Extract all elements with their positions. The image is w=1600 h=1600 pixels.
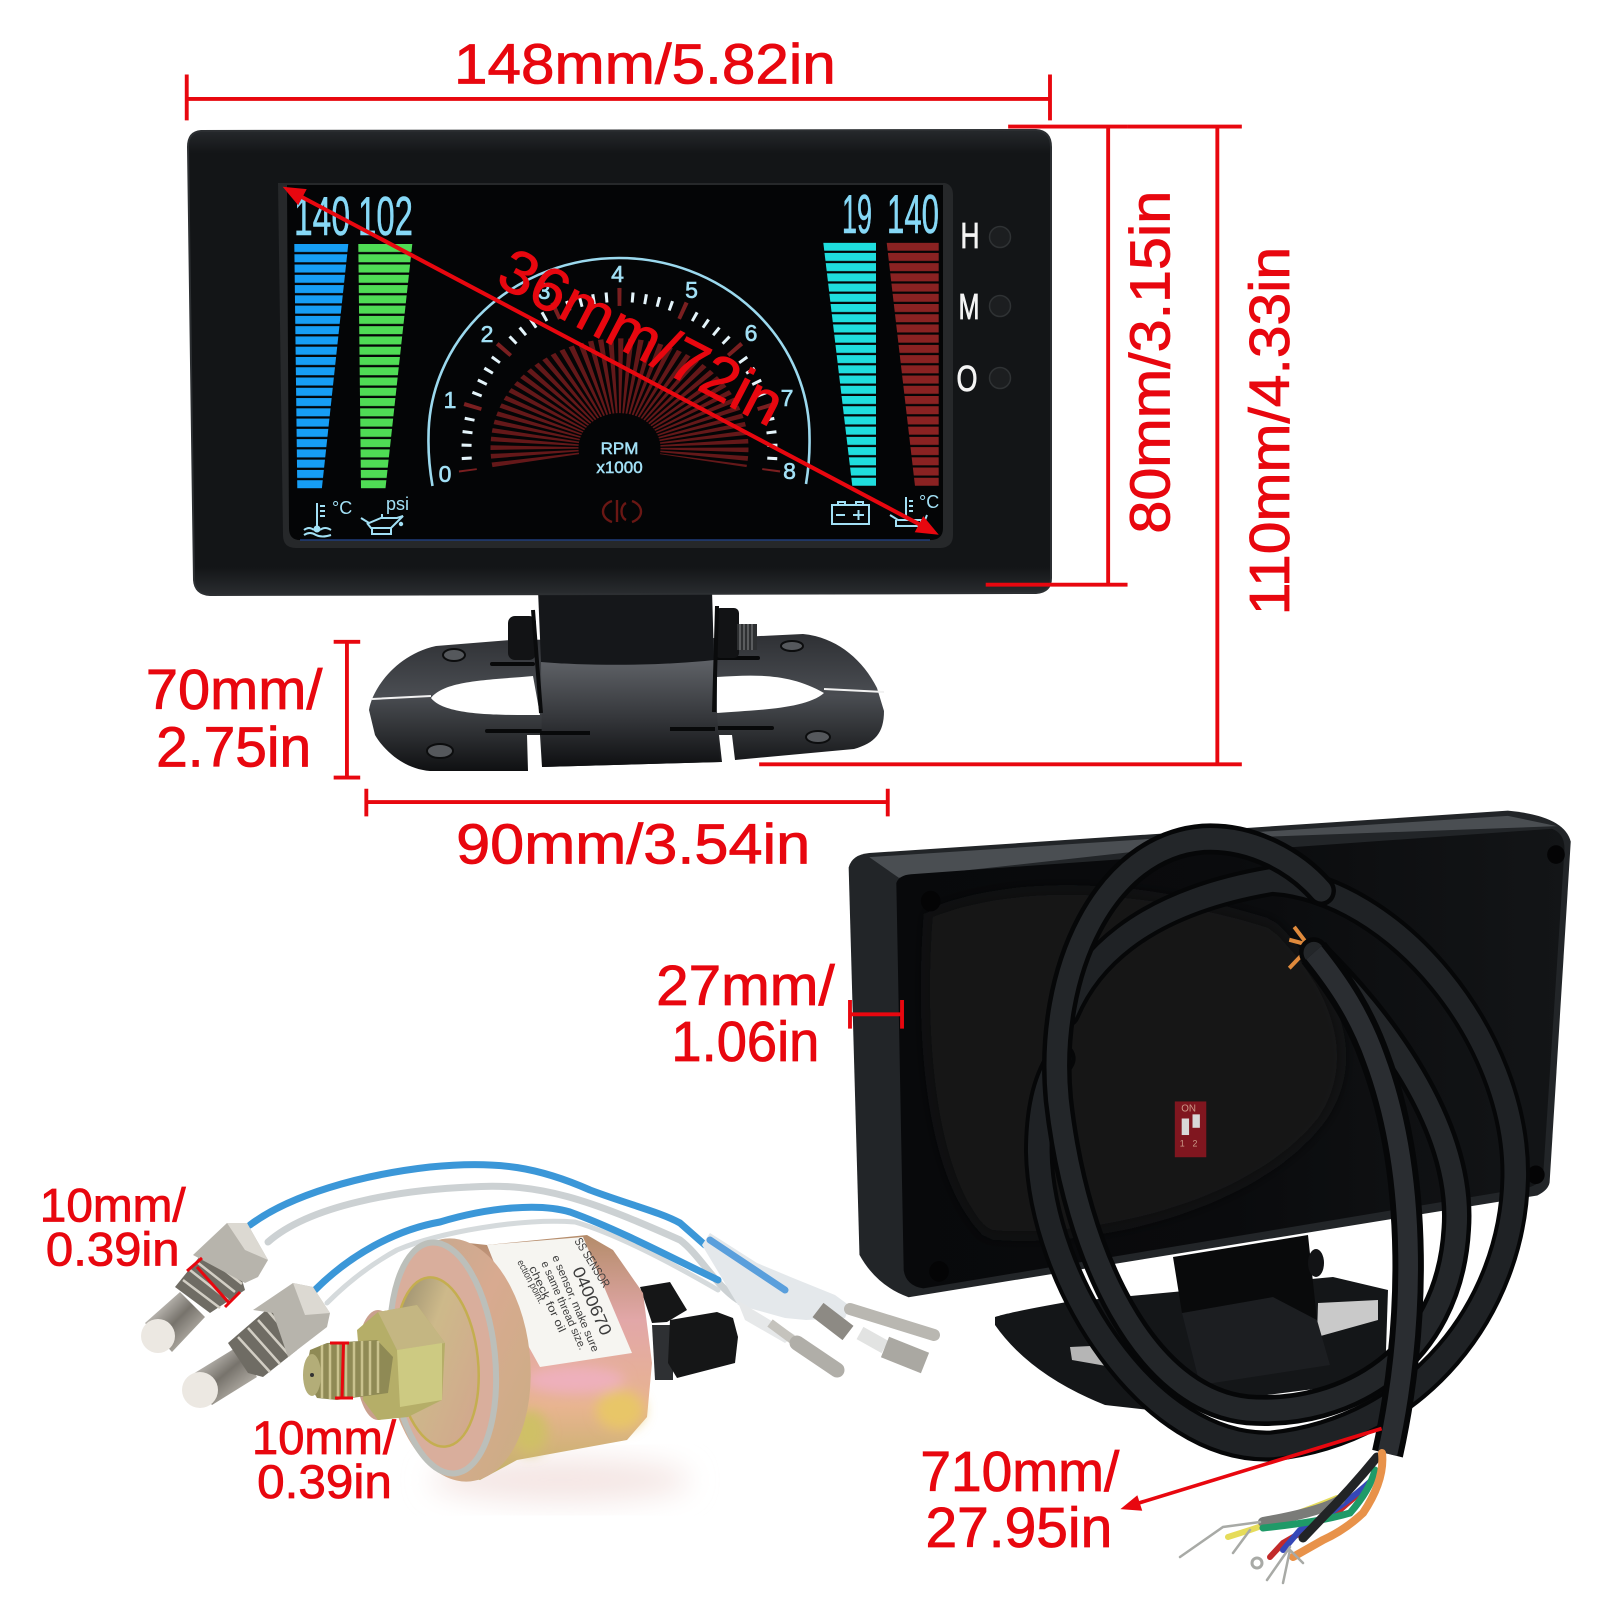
tach minor ticks: [467, 297, 773, 471]
dimension: temperature sensor thread 10mm: 0.39in: [46, 1223, 180, 1275]
dimension: housing depth 27mm: 27mm/: [656, 954, 835, 1017]
LCD bezel: [278, 183, 953, 548]
unit label: degrees C oil: °C: [919, 492, 939, 512]
plate seams and slots: [372, 689, 884, 699]
gauge housing: [188, 130, 1051, 595]
dimension: total height 110mm: [759, 127, 1301, 764]
connector sleeves: [702, 1233, 850, 1320]
terminal 3: [860, 1333, 885, 1347]
sender recess: [387, 1273, 487, 1451]
dimension: temperature sensor thread 10mm: [40, 1179, 187, 1275]
button labels: [956, 215, 980, 399]
bar: oil temperature red: [887, 243, 939, 486]
dimension: width 148mm: [187, 33, 1050, 120]
tach numerals: 1: [444, 387, 456, 413]
front gauge unit: [188, 130, 1051, 771]
tach numerals: 3: [538, 278, 550, 304]
dimension: base width 90mm: 90mm/3.54in: [456, 812, 810, 875]
LCD screen: [287, 183, 943, 540]
stand base plate: [369, 634, 884, 771]
screw holes: [427, 641, 830, 758]
stand pivot bolts: [508, 608, 757, 660]
oil pressure sender connectors: [640, 1282, 738, 1380]
body colour patches: [512, 1366, 644, 1454]
rear housing: [849, 811, 1571, 1297]
tach numerals: 6: [745, 320, 757, 346]
dimension: width 148mm: 148mm/5.82in: [454, 33, 836, 96]
maker logo: [603, 500, 641, 522]
bar: coolant blue: [294, 244, 348, 490]
sender washer: [356, 1310, 400, 1420]
sender label text: SS SENSOR: [571, 1235, 613, 1290]
coiled cable: [1039, 839, 1515, 1454]
sender flange: [374, 1231, 542, 1489]
rear gauge stand: [995, 1235, 1388, 1410]
dimension: cable 710mm: [920, 1429, 1382, 1559]
unit label: psi: psi: [386, 494, 409, 514]
readout: 140 right: 140: [887, 183, 939, 245]
dimension: diagonal screen: 36mm/72in: [488, 235, 795, 439]
dimension: cable 710mm: 27.95in: [926, 1496, 1112, 1559]
icon: battery: [832, 502, 869, 524]
DIP switch: [1175, 1101, 1206, 1157]
rear top highlight: [869, 816, 1557, 878]
tach red major ticks: [467, 297, 773, 471]
tach numerals: 2: [481, 321, 493, 347]
sender label text: e sensor, make sure: [549, 1253, 601, 1354]
dimension: total height 110mm: 110mm/4.33in: [1238, 247, 1301, 615]
dimension: base depth 70mm: [146, 642, 360, 778]
dimension: base depth 70mm: 70mm/: [146, 658, 323, 721]
sender thread: [303, 1340, 393, 1400]
icon: oil can: [361, 514, 403, 534]
tach outer arc: [428, 258, 810, 486]
dimension: housing depth 27mm: 1.06in: [671, 1010, 819, 1073]
stripped cable end wires: [1180, 1453, 1382, 1583]
sender label text: check for oil: [526, 1264, 568, 1335]
sender label text: [514, 1235, 615, 1354]
button knobs: [990, 226, 1010, 388]
stand bracket: [533, 590, 720, 767]
wire connectors: [702, 1233, 934, 1370]
sender label sticker: [487, 1237, 632, 1367]
terminal 1: [850, 1309, 934, 1335]
DIP switch: 1: [1180, 1138, 1185, 1148]
button labels: M: [958, 286, 980, 327]
dimension: cable 710mm: 710mm/: [920, 1440, 1120, 1503]
sender shadow: [430, 1458, 690, 1502]
sender label text: 0400670: [568, 1264, 615, 1338]
dimension: pressure sender thread 10mm: 0.39in: [257, 1456, 392, 1508]
tach numerals: 0: [439, 461, 451, 487]
terminal 4: [770, 1323, 797, 1343]
sender label text: e same thread size.: [538, 1259, 588, 1352]
LCD screen: 19: [842, 183, 872, 245]
dimension: housing height 80mm: [986, 127, 1181, 585]
dimension: base width 90mm: [366, 789, 888, 875]
icon: coolant temperature: [304, 503, 331, 536]
icon: oil temperature: [890, 497, 927, 526]
bar: oil pressure green: [358, 244, 412, 490]
dimension: housing height 80mm: 80mm/3.15in: [1118, 191, 1181, 534]
red radial rays: [534, 376, 704, 461]
bar: voltage teal: [823, 243, 876, 486]
dimension: base depth 70mm: 2.75in: [156, 715, 311, 778]
tachometer: [428, 258, 810, 487]
plate openings: [431, 676, 824, 715]
inner cable wires: [1289, 927, 1314, 968]
tach numerals: [439, 261, 796, 487]
tach numerals: 4: [611, 261, 624, 287]
unit label: degrees C coolant: °C: [332, 498, 352, 518]
DIP switch: ON: [1181, 1103, 1196, 1114]
dimension: diagonal screen: [283, 187, 939, 535]
rear face reflection: [925, 890, 1342, 1236]
rear gauge unit: [849, 811, 1571, 1454]
rear face: [896, 829, 1564, 1288]
RPM label: RPM: [601, 439, 638, 458]
dimension: temperature sensor thread 10mm: 10mm/: [40, 1179, 187, 1231]
mode buttons: [956, 215, 1010, 399]
DIP switch: 2: [1193, 1138, 1197, 1148]
rear screws: [921, 845, 1565, 1282]
dimension annotations: [40, 33, 1382, 1559]
dimension: pressure sender thread 10mm: 10mm/: [252, 1412, 397, 1464]
sensor lead wires: [250, 1165, 738, 1303]
sender hex nut: [357, 1305, 445, 1420]
temperature sensor 2: [182, 1283, 330, 1408]
temperature and oil pressure sensors: [141, 1165, 934, 1502]
terminal 2: [818, 1310, 848, 1333]
temperature sensor 1: [141, 1223, 268, 1353]
sender silver ring: [379, 1237, 507, 1479]
dimension: housing depth 27mm: [656, 954, 902, 1073]
RPM label: [596, 439, 643, 477]
tach numerals: 5: [685, 277, 698, 303]
RPM label: x1000: [596, 458, 643, 477]
sender label text: ection point.: [514, 1258, 547, 1306]
dimension: pressure sender thread 10mm: [252, 1412, 397, 1508]
readout: 140: 140: [294, 185, 350, 247]
tach numerals: 8: [783, 458, 796, 484]
oil pressure sender body: [440, 1235, 652, 1480]
readout: 102: 102: [358, 185, 413, 247]
button labels: H: [960, 215, 980, 256]
sensor thread diameter markers: [187, 1258, 353, 1398]
button labels: O: [956, 358, 978, 399]
tach numerals: 7: [781, 385, 793, 411]
